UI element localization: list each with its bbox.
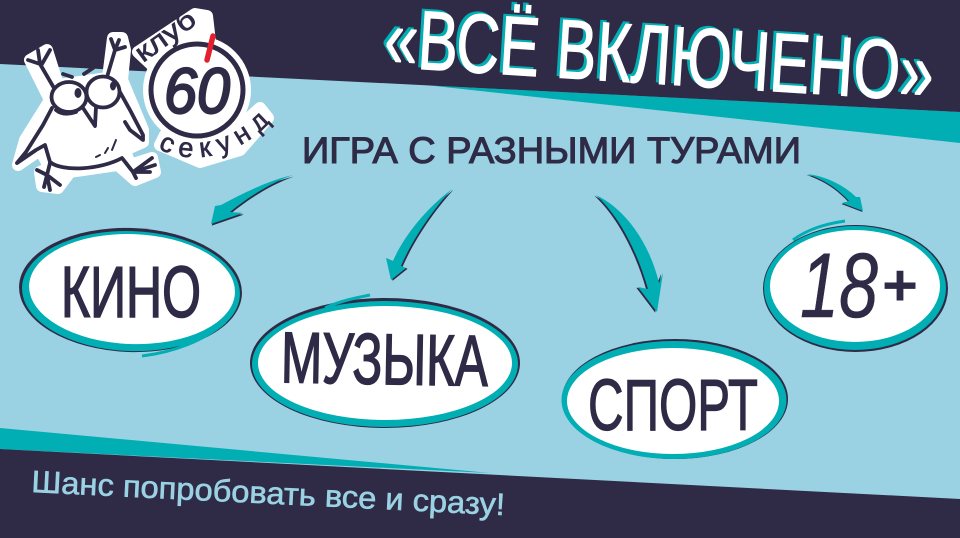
label: МУЗЫКА	[280, 318, 489, 402]
bubble: sport	[562, 339, 788, 459]
bubble: cinema	[17, 224, 244, 356]
sticker background	[18, 14, 268, 188]
label: СПОРТ	[588, 366, 758, 446]
logo word seconds: секунд	[160, 112, 274, 159]
logo number 60: 60	[164, 55, 230, 127]
logo: owl and club 60 seconds	[12, 4, 274, 194]
label 18: 18	[800, 235, 878, 337]
heading: ИГРА С РАЗНЫМИ ТУРАМИ	[302, 130, 801, 171]
top banner	[0, 0, 960, 143]
bubble: 18 plus	[763, 221, 948, 352]
arrow to cinema	[211, 175, 294, 226]
bubble: music	[250, 295, 520, 428]
arrow to 18 plus	[806, 174, 863, 212]
red tick	[207, 36, 213, 60]
owl pupils	[74, 82, 116, 98]
arrow to music	[386, 189, 454, 281]
tagline: Шанс попробовать все и сразу!	[31, 464, 506, 522]
logo word club: клуб	[129, 4, 202, 68]
label: КИНО	[61, 253, 201, 333]
owl	[17, 39, 155, 190]
arrow to sport	[594, 195, 663, 313]
logo ring	[151, 44, 243, 136]
label plus: +	[882, 253, 918, 318]
bottom banner	[0, 428, 960, 538]
